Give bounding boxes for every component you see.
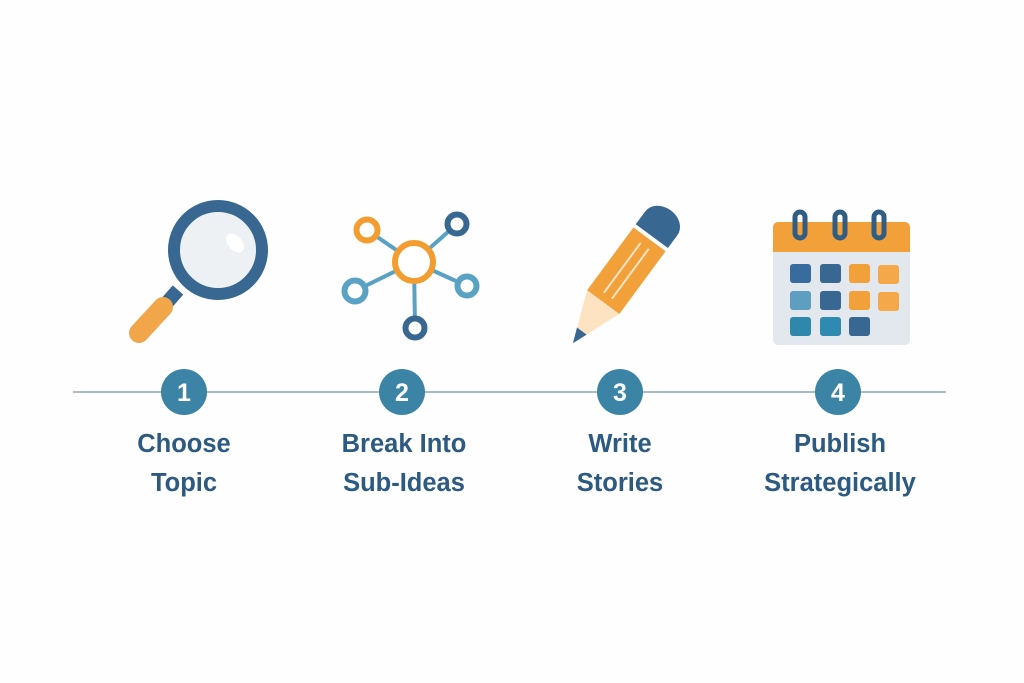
step 2: 2 [395, 379, 409, 407]
icon: network [344, 214, 476, 338]
step 1 [137, 369, 231, 497]
icon: magnifying glass [139, 206, 262, 333]
step 2 [342, 369, 466, 497]
step 4 [764, 369, 917, 497]
icon: calendar [773, 212, 910, 345]
step 4: Publish [794, 430, 886, 458]
step 2: Break Into [342, 430, 466, 458]
step 3: Write [588, 430, 652, 458]
step 4: 4 [831, 379, 845, 407]
step 1: Choose [137, 430, 231, 458]
step 1: Topic [151, 469, 217, 497]
step 3: Stories [577, 469, 663, 497]
step 2: Sub-Ideas [343, 469, 465, 497]
icon: pencil [557, 199, 687, 355]
step 3 [577, 369, 663, 497]
step 1: 1 [177, 379, 191, 407]
step 4: Strategically [764, 469, 917, 497]
step 3: 3 [613, 379, 627, 407]
